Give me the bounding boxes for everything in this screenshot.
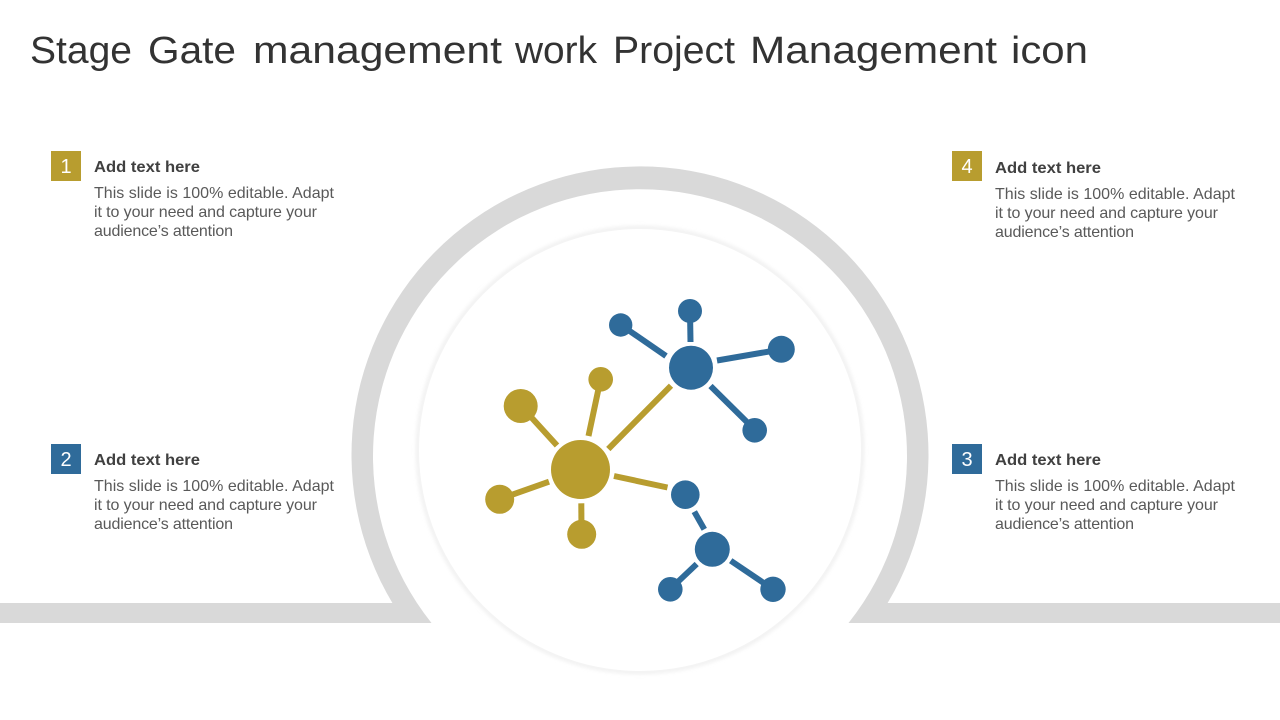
badge 3 — [952, 444, 982, 474]
title: management — [253, 30, 502, 72]
text block 1: audience’s attention — [94, 223, 233, 240]
text block 3: it to your need and capture your — [995, 497, 1219, 514]
title: icon — [1011, 30, 1088, 72]
text block 1: This slide is 100% editable. Adapt — [94, 185, 335, 202]
inner white circle — [418, 228, 862, 672]
badge 2 — [51, 444, 81, 474]
title: work — [514, 30, 598, 72]
text block 4: This slide is 100% editable. Adapt — [995, 186, 1236, 203]
heading 4: Add text here — [995, 160, 1101, 177]
heading 2: Add text here — [94, 452, 200, 469]
text block 4: audience’s attention — [995, 224, 1134, 241]
heading 3: Add text here — [995, 452, 1101, 469]
title: Project — [613, 30, 735, 72]
network icon — [485, 299, 795, 602]
title: Stage — [30, 30, 132, 72]
badge 3: 3 — [961, 449, 973, 471]
title: Management — [750, 30, 997, 72]
badge 1: 1 — [60, 156, 72, 178]
panel: item 1 — [51, 151, 335, 240]
badge 2: 2 — [60, 449, 72, 471]
badge 1 — [51, 151, 81, 181]
text block 1 — [94, 185, 335, 240]
title: Gate — [148, 30, 236, 72]
title — [30, 30, 1088, 72]
panel: item 2 — [51, 444, 335, 533]
text block 2: This slide is 100% editable. Adapt — [94, 478, 335, 495]
ring with baseline bars — [0, 166, 1280, 623]
badge 4: 4 — [961, 156, 973, 178]
icon: gold cluster — [485, 367, 671, 549]
text block 2: it to your need and capture your — [94, 497, 318, 514]
text block 3: This slide is 100% editable. Adapt — [995, 478, 1236, 495]
icon: upper blue cluster — [609, 299, 795, 443]
text block 4: it to your need and capture your — [995, 205, 1219, 222]
heading 1: Add text here — [94, 159, 200, 176]
icon: lower blue cluster — [658, 480, 786, 602]
badge 4 — [952, 151, 982, 181]
text block 3 — [995, 478, 1236, 533]
text block 4 — [995, 186, 1236, 241]
text block 2: audience’s attention — [94, 516, 233, 533]
panel: item 3 — [952, 444, 1236, 533]
text block 1: it to your need and capture your — [94, 204, 318, 221]
text block 3: audience’s attention — [995, 516, 1134, 533]
text block 2 — [94, 478, 335, 533]
panel: item 4 — [952, 151, 1236, 241]
